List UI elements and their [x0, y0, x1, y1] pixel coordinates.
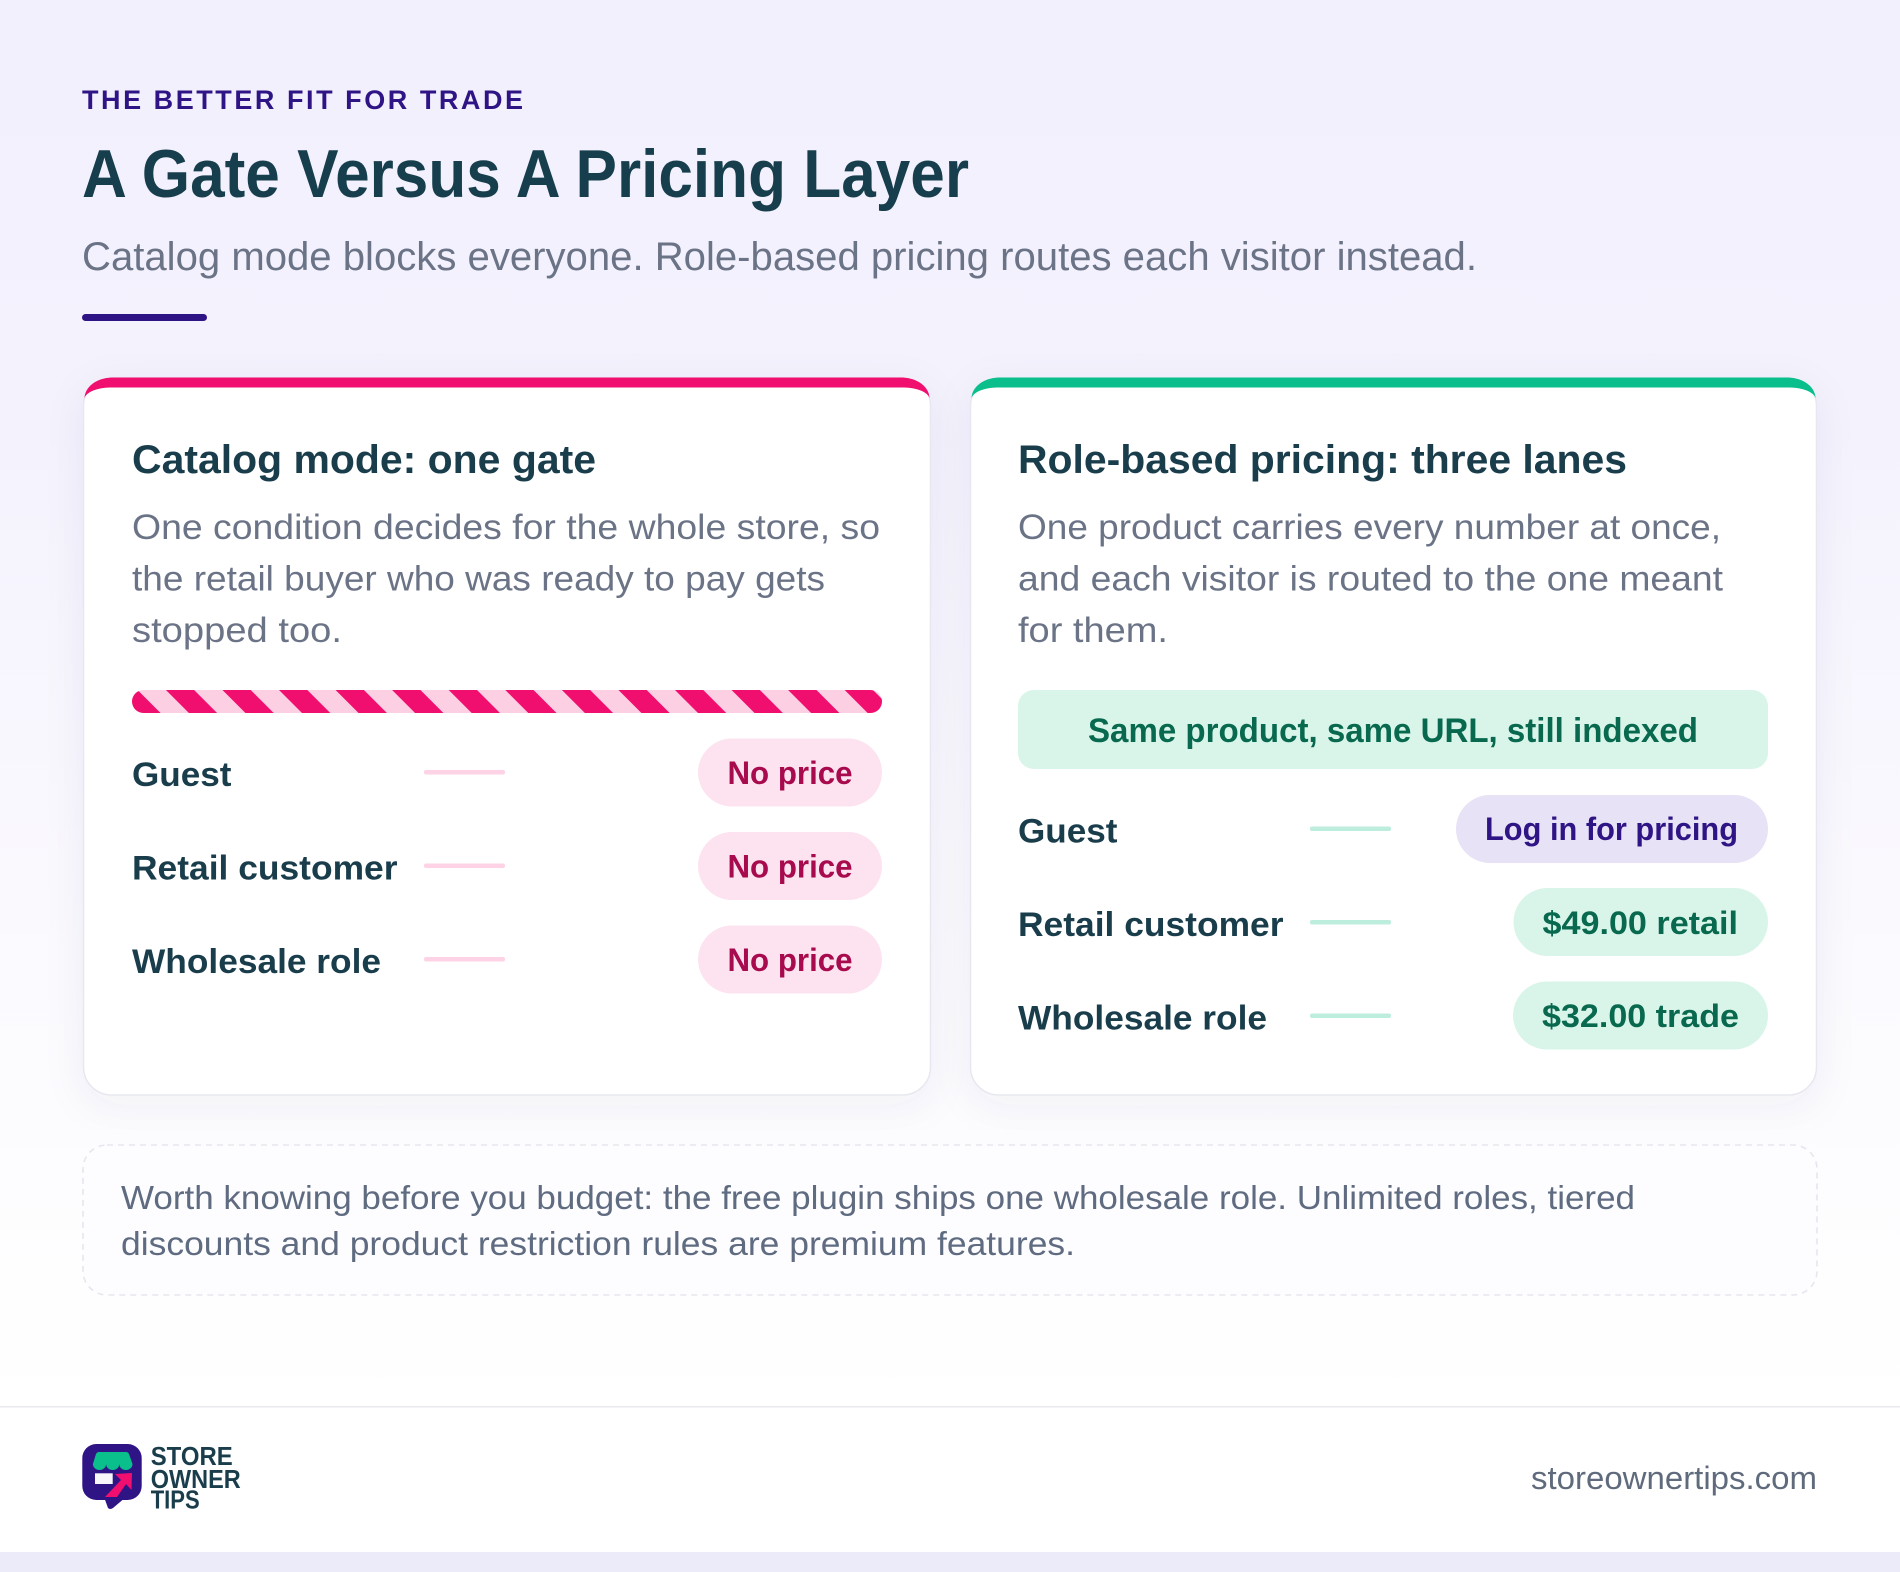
row: guest blocked: Guest	[132, 756, 232, 794]
card description: the retail buyer who was ready to pay gets	[132, 560, 825, 598]
row: guest login	[1018, 795, 1768, 863]
row: retail blocked: No price	[728, 848, 852, 884]
eyebrow: THE BETTER FIT FOR TRADE	[82, 85, 523, 115]
card heading: Catalog mode: one gate	[132, 438, 596, 482]
row: retail price	[1018, 888, 1768, 956]
card accent top	[84, 378, 930, 398]
logo icon	[82, 1444, 142, 1509]
striped gate bar	[132, 690, 882, 713]
row: retail blocked: Retail customer	[132, 850, 398, 888]
logo wordmark: OWNER	[151, 1466, 241, 1494]
same product banner	[1018, 690, 1768, 769]
row: wholesale blocked	[132, 926, 882, 994]
card heading: Role-based pricing: three lanes	[1018, 438, 1627, 482]
callout: budget note: Worth knowing before you budget: the free plugin ships one wholesale role. Unlimited roles, tiered	[121, 1179, 1635, 1216]
row: wholesale price: $32.00 trade	[1542, 998, 1739, 1034]
subtitle: Catalog mode blocks everyone. Role-based pricing routes each visitor instead.	[82, 235, 1477, 279]
row: wholesale price	[1018, 982, 1768, 1050]
row: guest blocked	[132, 738, 882, 806]
row: retail price: $49.00 retail	[1542, 905, 1738, 941]
card description	[1018, 508, 1723, 650]
logo wordmark	[151, 1443, 241, 1514]
row: retail blocked	[132, 832, 882, 900]
row: wholesale blocked: Wholesale role	[132, 943, 381, 981]
panel: role-based pricing	[970, 378, 1816, 1095]
logo wordmark: STORE	[151, 1443, 233, 1471]
row: retail price: Retail customer	[1018, 906, 1284, 944]
panel: catalog mode	[84, 378, 930, 1095]
website url: storeownertips.com	[1531, 1460, 1817, 1496]
card description: stopped too.	[132, 611, 342, 650]
row: wholesale price: Wholesale role	[1018, 1000, 1267, 1038]
card background	[970, 378, 1816, 1095]
card accent top	[972, 378, 1816, 398]
callout: budget note: discounts and product restriction rules are premium features.	[121, 1225, 1075, 1262]
row: guest login: Guest	[1018, 812, 1118, 850]
card description	[132, 508, 880, 650]
title: A Gate Versus A Pricing Layer	[82, 136, 969, 212]
card description: and each visitor is routed to the one meant	[1018, 560, 1723, 598]
card description: One condition decides for the whole store, so	[132, 508, 880, 547]
row: guest blocked: No price	[728, 755, 852, 791]
callout: budget note	[83, 1145, 1817, 1295]
title accent rule	[82, 314, 207, 321]
row: guest login: Log in for pricing	[1485, 811, 1738, 847]
card description: One product carries every number at once,	[1018, 508, 1721, 547]
footer	[0, 1406, 1900, 1552]
same product banner: Same product, same URL, still indexed	[1088, 712, 1698, 750]
logo wordmark: TIPS	[151, 1486, 200, 1514]
card background	[84, 378, 930, 1095]
row: wholesale blocked: No price	[728, 942, 852, 978]
bottom band	[0, 1552, 1900, 1572]
card description: for them.	[1018, 611, 1168, 650]
